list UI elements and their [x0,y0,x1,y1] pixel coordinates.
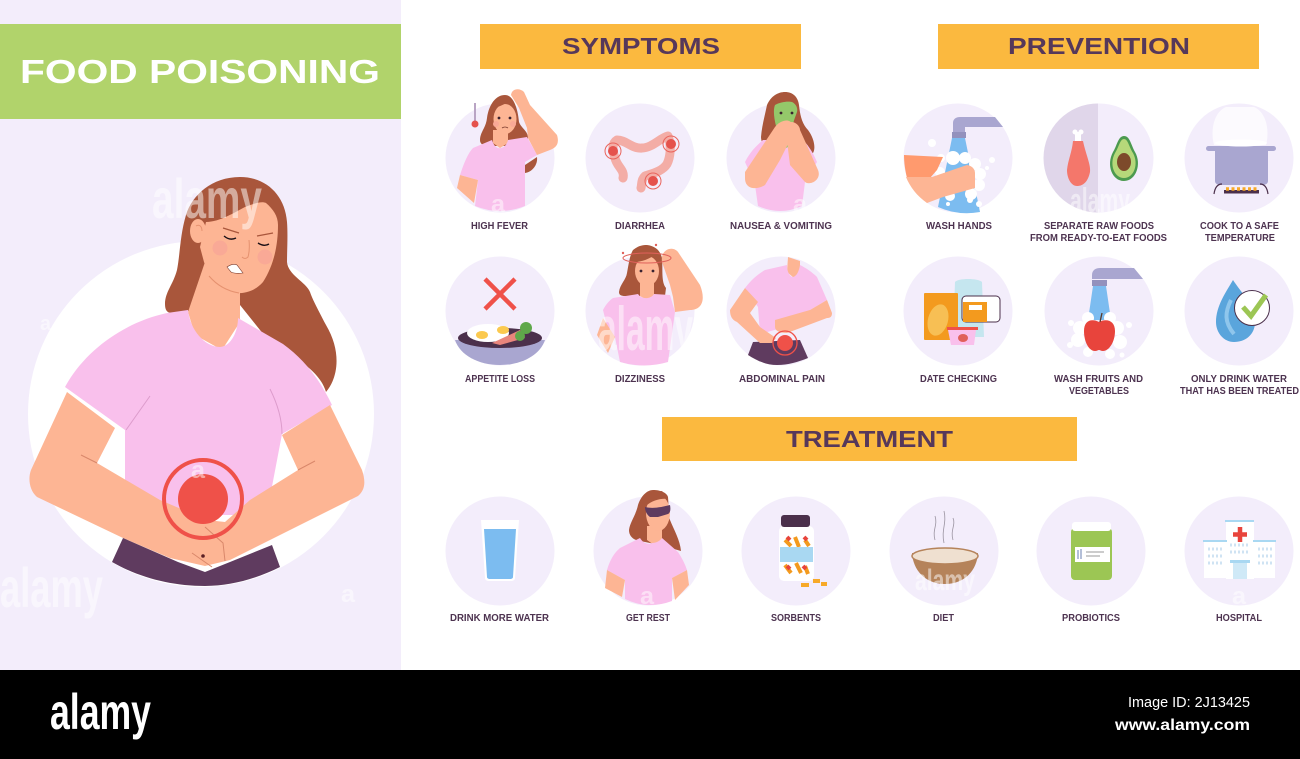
item: dizziness [586,244,703,385]
item: wash hands [904,104,1012,232]
heading: prevention [938,24,1259,69]
footer bar: alamy [50,684,151,740]
item: high fever [446,89,558,232]
item: get rest: GET REST [626,613,670,624]
item: nausea and vomiting: NAUSEA & VOMITING [730,221,832,232]
item: wash fruits and vegetables: WASH FRUITS AND [1054,374,1143,385]
item: hospital: HOSPITAL [1216,613,1262,624]
item: wash fruits and vegetables: VEGETABLES [1069,386,1129,397]
item: diarrhea [586,104,694,232]
watermarks: a [40,313,52,335]
item: high fever: HIGH FEVER [471,221,529,232]
watermarks: alamy [598,295,693,364]
item: sorbents: SORBENTS [771,613,821,624]
item: appetite loss [446,256,554,385]
heading: symptoms [480,24,801,69]
watermarks: a [191,457,206,484]
item: separate raw foods: FROM READY-TO-EAT FOODS [1030,233,1167,244]
item: abdominal pain [726,256,836,385]
item: get rest [594,490,702,624]
watermarks: a [491,191,506,218]
watermarks: alamy [0,556,103,619]
item: abdominal pain: ABDOMINAL PAIN [739,374,825,385]
footer bar: www.alamy.com [1114,717,1250,734]
heading: prevention: PREVENTION [1008,33,1190,59]
item: date checking [904,256,1012,385]
heading: treatment: TREATMENT [786,426,953,452]
item: nausea and vomiting [726,92,836,232]
item: drink more water [446,496,554,624]
item: only drink treated water: ONLY DRINK WATER [1191,374,1288,385]
watermarks: alamy [1070,182,1130,220]
item: drink more water: DRINK MORE WATER [450,613,550,624]
title banner [0,24,401,119]
heading: treatment [662,417,1077,461]
item: cook to a safe temperature: COOK TO A SAFE [1200,221,1279,232]
watermarks: a [1232,583,1247,610]
item: separate raw foods [1030,104,1167,244]
item: only drink treated water [1180,256,1299,397]
item: date checking: DATE CHECKING [920,374,997,385]
panel: left illustration [0,0,401,670]
footer bar: Image ID: 2J13425 [1128,694,1250,711]
item: cook to a safe temperature [1184,104,1294,244]
item: diet [890,496,998,624]
watermarks: a [640,583,655,610]
item: sorbents [742,496,850,624]
item: probiotics [1036,496,1146,624]
item: hospital [1184,496,1294,624]
item: dizziness: DIZZINESS [615,374,665,385]
item: separate raw foods: SEPARATE RAW FOODS [1044,221,1154,232]
watermarks: alamy [152,167,262,230]
item: cook to a safe temperature: TEMPERATURE [1205,233,1275,244]
item: diarrhea: DIARRHEA [615,221,665,232]
watermarks: a [341,581,356,608]
watermarks: alamy [915,564,975,597]
heading: symptoms: SYMPTOMS [562,33,720,59]
panel: treatment [446,490,1294,624]
item: diet: DIET [933,613,954,624]
footer bar [0,670,1300,759]
title banner: FOOD POISONING [20,53,380,90]
watermarks: a [793,191,808,218]
illustration: woman with stomach pain [28,177,374,587]
item: wash fruits and vegetables [1044,256,1154,397]
panel: prevention [904,104,1299,397]
item: wash hands: WASH HANDS [926,221,992,232]
item: appetite loss: APPETITE LOSS [465,374,535,385]
panel: symptoms [446,89,836,385]
watermarks [0,167,1247,619]
item: probiotics: PROBIOTICS [1062,613,1120,624]
